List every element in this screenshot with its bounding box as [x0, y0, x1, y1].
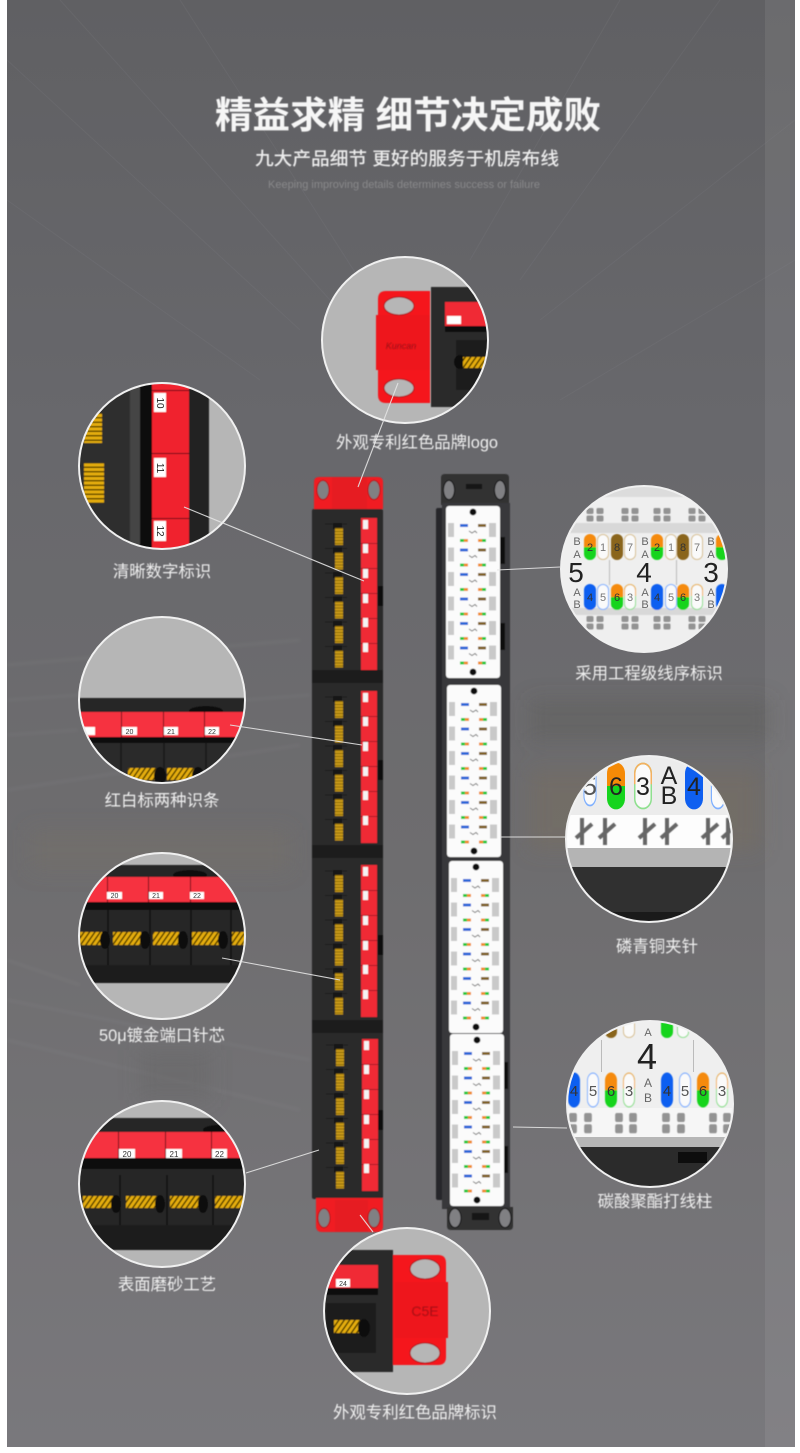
callout circle: red brand bracket bottom: [320, 1228, 490, 1394]
front patch panel (red and black): [312, 477, 383, 1232]
callout circle: phosphor bronze clips: A: [661, 762, 678, 790]
module 3: [322, 865, 377, 1017]
callout circle: polycarbonate punch posts: B: [644, 1091, 652, 1105]
callout circle: wiring sequence labels: 6: [614, 592, 620, 604]
callout circle: red brand bracket bottom: C5E: [411, 1303, 439, 1319]
callout circle: wiring sequence labels: [560, 485, 728, 652]
callout circle: wiring sequence labels: 1: [668, 542, 674, 554]
callout circle: wiring sequence labels: 3: [703, 557, 719, 588]
label: bottom bracket: 外观专利红色品牌标识: [333, 1404, 497, 1422]
callout circle: wiring sequence labels: 7: [627, 542, 633, 554]
callout circle: wiring sequence labels: 7: [694, 542, 700, 554]
card 3: [449, 861, 503, 1033]
callout circle: wiring sequence labels: 8: [614, 542, 620, 554]
callout circle: gold plated pins: 22: [193, 893, 201, 900]
callout circle: polycarbonate punch posts: 6: [699, 1083, 707, 1100]
label: strips: 红白标两种识条: [105, 792, 219, 810]
callout circle: wiring sequence labels: B: [707, 536, 715, 548]
callout circle: wiring sequence labels: A: [573, 549, 581, 561]
leader lines: [184, 383, 567, 1232]
module 1: [322, 518, 377, 670]
callout circle: phosphor bronze clips: 3: [636, 773, 650, 801]
title: 精益求精 细节决定成败: [215, 95, 601, 136]
callout circle: wiring sequence labels: A: [707, 587, 715, 599]
callout circle: red and white strips: 20: [126, 729, 133, 736]
callout circle: polycarbonate punch posts: 4: [570, 1083, 578, 1100]
callout circle: red logo bracket: [322, 257, 501, 423]
callout circle: wiring sequence labels: B: [641, 536, 649, 548]
english subtitle: Keeping improving details determines success or failure: [268, 179, 540, 191]
label: bronze clips: 磷青铜夹针: [616, 938, 698, 956]
callout circle: clear number labels: 11: [154, 463, 165, 474]
callout circle: wiring sequence labels: 5: [568, 557, 584, 588]
callout circle: wiring sequence labels: B: [707, 599, 715, 611]
callout circle: phosphor bronze clips: 4: [687, 773, 701, 801]
subtitle: 九大产品细节 更好的服务于机房布线: [255, 149, 559, 169]
callout circle: red and white strips: [78, 617, 246, 787]
label: gold pins: 50μ镀金端口针芯: [99, 1027, 225, 1045]
callout circle: wiring sequence labels: 4: [636, 557, 652, 588]
black body: [312, 509, 383, 1199]
callout circle: gold plated pins: [78, 853, 246, 1019]
callout circle: wiring sequence labels: B: [573, 536, 581, 548]
callout circle: frosted surface: 21: [170, 1150, 179, 1159]
label: top bracket: 外观专利红色品牌logo: [336, 434, 498, 452]
callout circle: polycarbonate punch posts: A: [644, 1027, 652, 1039]
callout circle: polycarbonate punch posts: 4: [637, 1036, 657, 1077]
callout circle: gold plated pins: 21: [152, 893, 160, 900]
callout circle: polycarbonate punch posts: 3: [625, 1083, 633, 1100]
rear body: [436, 503, 510, 1209]
callout circle: frosted surface: 20: [123, 1150, 132, 1159]
callout circle: red brand bracket bottom: 24: [339, 1281, 347, 1288]
card 2: [447, 685, 501, 857]
bottom red bracket: [316, 1198, 383, 1232]
callout circle: clear number labels: [78, 383, 245, 550]
callout circle: wiring sequence labels: A: [641, 587, 649, 599]
callout circle: wiring sequence labels: 8: [680, 542, 686, 554]
callout circle: polycarbonate punch posts: [567, 1012, 735, 1190]
callout circle: wiring sequence labels: 4: [654, 592, 660, 604]
callout circle: phosphor bronze clips: 5: [583, 773, 597, 801]
callout circle: wiring sequence labels: 1: [600, 542, 606, 554]
callout circle: wiring sequence labels: A: [641, 549, 649, 561]
callout circle: wiring sequence labels: 3: [627, 592, 633, 604]
callout circle: wiring sequence labels: 6: [680, 592, 686, 604]
callout circle: wiring sequence labels: 2: [654, 542, 660, 554]
label: punch posts: 碳酸聚酯打线柱: [598, 1193, 712, 1211]
callout circle: polycarbonate punch posts: 5: [589, 1083, 597, 1100]
callout circle: polycarbonate punch posts: 3: [718, 1083, 726, 1100]
callout circle: polycarbonate punch posts: 5: [681, 1083, 689, 1100]
callout circle: polycarbonate punch posts: A: [644, 1076, 652, 1090]
callout circle: wiring sequence labels: 5: [600, 592, 606, 604]
card 1: [446, 506, 500, 678]
label: surface finish: 表面磨砂工艺: [118, 1276, 216, 1294]
label: number markers: 清晰数字标识: [113, 563, 211, 581]
callout circle: gold plated pins: 20: [111, 893, 118, 900]
card 4: [450, 1034, 504, 1206]
callout circle: clear number labels: 12: [154, 525, 165, 537]
callout circle: wiring sequence labels: 3: [694, 592, 700, 604]
callout circle: wiring sequence labels: B: [641, 599, 649, 611]
top red bracket: [314, 477, 383, 509]
callout circle: polycarbonate punch posts: 6: [607, 1083, 615, 1100]
callout circle: wiring sequence labels: A: [707, 549, 715, 561]
callout circle: phosphor bronze clips: [565, 756, 738, 925]
callout circle: phosphor bronze clips: 6: [609, 773, 623, 801]
callout circle: red and white strips: 21: [167, 729, 175, 736]
rear patch panel (white cards): [436, 474, 513, 1230]
callout circle: wiring sequence labels: B: [573, 599, 581, 611]
callout circle: clear number labels: 10: [154, 397, 165, 409]
rear bottom bracket: [447, 1207, 513, 1230]
module 4: [323, 1039, 378, 1191]
callout circle: red and white strips: 22: [208, 729, 216, 736]
callout circle: frosted surface: [78, 1101, 246, 1267]
callout circle: red logo bracket: Kuncan: [386, 341, 416, 351]
label: wiring sequence: 采用工程级线序标识: [575, 665, 723, 683]
callout circle: wiring sequence labels: A: [573, 587, 581, 599]
callout circle: frosted surface: 22: [215, 1150, 224, 1159]
callout circle: wiring sequence labels: 2: [587, 542, 593, 554]
module 2: [322, 691, 377, 843]
callout circle: phosphor bronze clips: B: [661, 782, 677, 810]
callout circle: wiring sequence labels: 4: [587, 592, 593, 604]
rear top bracket: [441, 474, 509, 505]
callout circle: wiring sequence labels: 5: [668, 592, 674, 604]
callout circle: polycarbonate punch posts: 4: [663, 1083, 671, 1100]
